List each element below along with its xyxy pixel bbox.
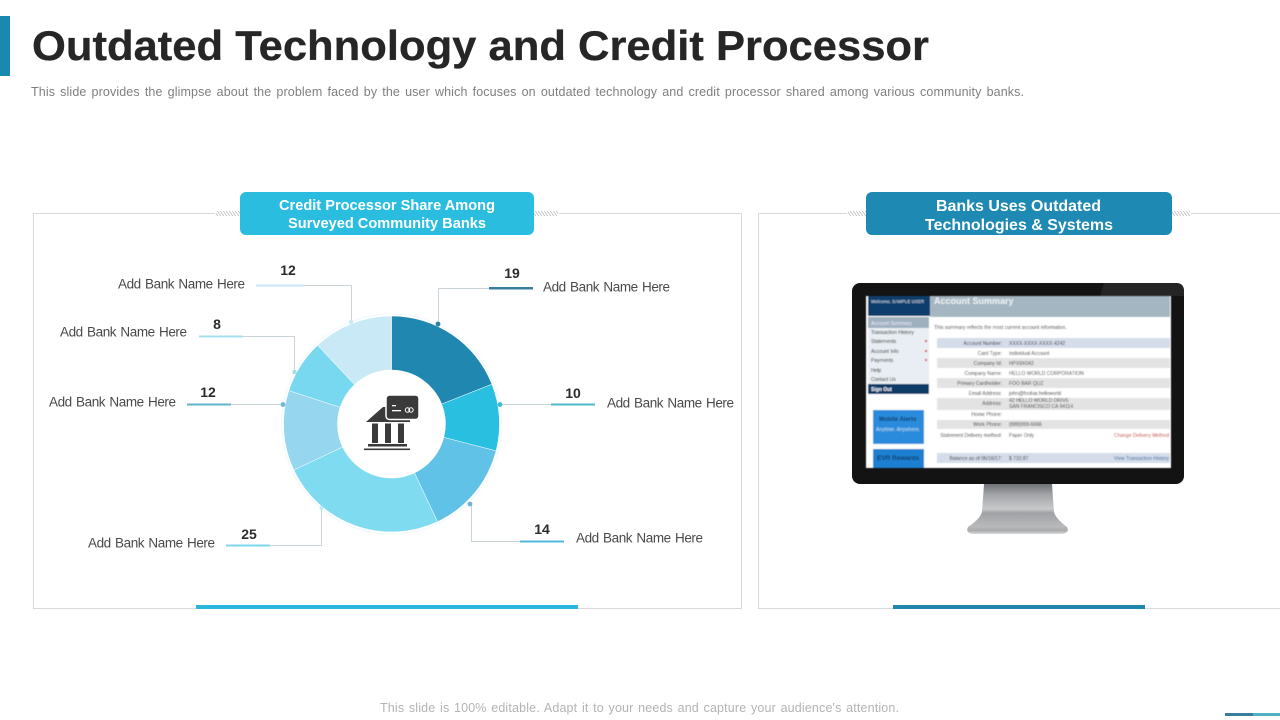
- header hatch left: [215, 210, 240, 217]
- leader: 25: 25: [241, 526, 257, 542]
- icon: desktop monitor: [852, 283, 1184, 534]
- leader: 14: Add Bank Name Here: [576, 530, 703, 546]
- screen account table: This summary reflects the most current account information.: [934, 325, 1067, 331]
- panel accent bar: [893, 605, 1145, 609]
- screen account table: (888)999-6666: [1009, 422, 1042, 428]
- screen sidebar: [868, 296, 930, 468]
- screen account table: Primary Cardholder:: [957, 381, 1002, 387]
- leader: 19: [436, 265, 670, 326]
- screen sidebar: Mobile Alerts: [879, 417, 917, 423]
- screen account table: Email Address:: [969, 391, 1002, 397]
- screen sidebar: Account Info: [871, 349, 899, 355]
- screen account table: Work Phone:: [973, 422, 1002, 428]
- screen account table: FOO BAR QUZ: [1009, 381, 1043, 387]
- screen sidebar: Transaction History: [871, 330, 914, 336]
- panel heading: Surveyed Community Banks: [288, 215, 486, 232]
- screen sidebar: Anytime. Anywhere.: [876, 427, 920, 433]
- panel heading: Technologies & Systems: [925, 217, 1113, 234]
- title accent bar: [0, 16, 10, 76]
- leader: 12 left: 12: [200, 384, 216, 400]
- screen account table: Company Name:: [964, 371, 1002, 377]
- screen account table: Balance as of 06/16/17:: [949, 456, 1002, 462]
- segment 8: [289, 345, 354, 407]
- screen sidebar: EVR Rewards: [877, 455, 920, 462]
- corner progress bar: [1225, 713, 1280, 716]
- panel border: [34, 214, 742, 608]
- leader: 12 top: 12: [280, 262, 296, 278]
- screen sidebar: Payments: [871, 358, 894, 364]
- screen account table: Paper Only: [1009, 433, 1035, 439]
- leader: 8: [60, 316, 297, 374]
- leader: 19: 19: [504, 265, 520, 281]
- leader: 12 left: [49, 384, 285, 410]
- screen sidebar: Statements: [871, 339, 897, 345]
- header hatch right: [534, 210, 559, 217]
- segment 19: [392, 316, 492, 404]
- header hatch right: [1172, 210, 1191, 217]
- screen header: Account Summary: [934, 296, 1014, 306]
- leader: 14: [468, 502, 703, 546]
- leader: 25: Add Bank Name Here: [88, 536, 215, 550]
- segment 12 top: [318, 316, 392, 385]
- leader: 12 top: Add Bank Name Here: [118, 276, 245, 292]
- screen account table: [934, 325, 1170, 463]
- screen header: [930, 296, 1170, 317]
- header hatch left: [847, 210, 866, 217]
- subtitle: This slide provides the glimpse about the problem faced by the user which focuses on outdated technology and credit processor shared among various community banks.: [31, 85, 1024, 99]
- screen sidebar: Welcome, SAMPLE USER: [871, 299, 925, 304]
- leader: 8: 8: [213, 316, 221, 332]
- panel: outdated technologies: [758, 192, 1280, 609]
- leader: 12 left: Add Bank Name Here: [49, 394, 176, 410]
- footer note: This slide is 100% editable. Adapt it to your needs and capture your audience's attention.: [380, 701, 899, 715]
- screen account table: Card Type:: [978, 351, 1002, 357]
- monitor frame: [852, 283, 1184, 484]
- screen sidebar: Account Summary: [871, 321, 912, 327]
- screen account table: Change Delivery Method: [1114, 433, 1169, 439]
- title: Outdated Technology and Credit Processor: [32, 22, 929, 69]
- leader: 10: Add Bank Name Here: [607, 396, 734, 410]
- screen account table: HPX9X042: [1009, 361, 1034, 367]
- leader: 25: [88, 506, 324, 550]
- panel border: [758, 214, 1280, 608]
- leader: 8: Add Bank Name Here: [60, 324, 187, 340]
- panel heading: [240, 192, 534, 235]
- icon: bank with credit card: [364, 395, 419, 450]
- screen sidebar: Help: [871, 368, 882, 374]
- panel accent bar: [196, 605, 578, 609]
- leader: 19: Add Bank Name Here: [543, 280, 670, 294]
- panel heading: [866, 192, 1172, 235]
- screen sidebar: Sign Out: [871, 387, 892, 393]
- screen account table: View Transaction History: [1114, 456, 1169, 462]
- segment 12 left: [284, 391, 343, 470]
- screen account table: Statement Delivery method:: [940, 433, 1002, 439]
- panel: credit processor share: [34, 192, 742, 609]
- leader: 10: 10: [565, 385, 581, 401]
- segment 25: [294, 447, 438, 532]
- screen account table: XXXX-XXXX-XXXX-4242: [1009, 341, 1065, 347]
- monitor stand: [967, 484, 1068, 534]
- screen account table: Individual Account: [1009, 351, 1050, 357]
- screen sidebar: Contact Us: [871, 377, 896, 383]
- screen account table: SAN FRANCISCO CA 94114: [1009, 404, 1073, 410]
- screen account table: 42 HELLO WORLD DRIVE: [1009, 398, 1070, 404]
- segment 14: [414, 437, 496, 522]
- segment 10: [442, 384, 500, 451]
- leader: 14: 14: [534, 521, 550, 537]
- donut chart: [282, 314, 502, 534]
- panel heading: Credit Processor Share Among: [279, 197, 495, 214]
- screen account table: Account Number:: [963, 341, 1002, 347]
- panel heading: Banks Uses Outdated: [936, 198, 1101, 215]
- screen account table: Address:: [982, 401, 1002, 407]
- screen account table: $ 732.87: [1009, 456, 1029, 462]
- monitor screen: [866, 296, 1171, 468]
- screen account table: HELLO WORLD CORPORATION: [1009, 371, 1084, 377]
- screen account table: Home Phone:: [971, 412, 1002, 418]
- screen account table: john@foobar.helloworld: [1008, 391, 1062, 397]
- leader: 10: [498, 385, 734, 410]
- screen account table: Company Id:: [974, 361, 1002, 367]
- leader: 12 top: [118, 262, 353, 324]
